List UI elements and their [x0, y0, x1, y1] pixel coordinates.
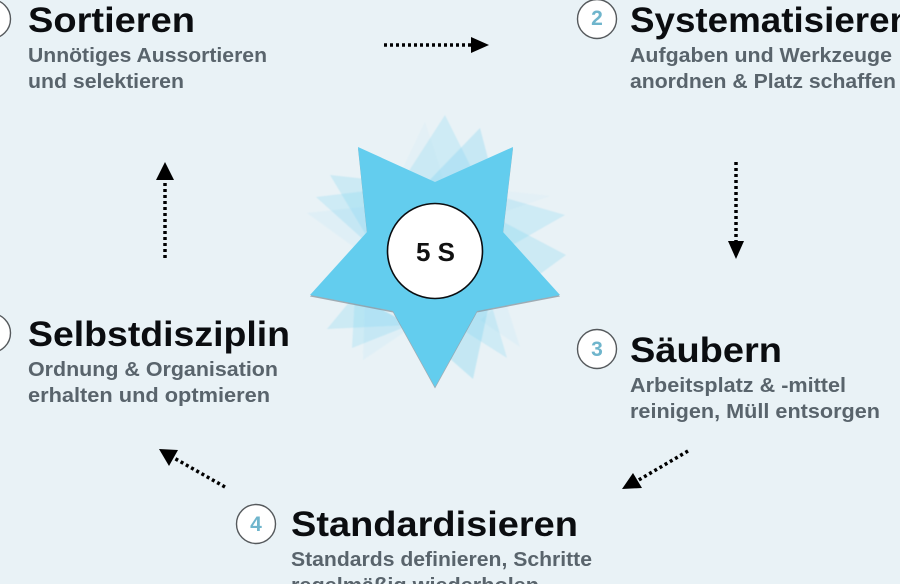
- step 2: Systematisieren: [578, 0, 900, 93]
- description: Unnötiges Aussortieren: [28, 45, 267, 67]
- arrow: step 3 to 4: [622, 451, 688, 489]
- description: [28, 45, 267, 93]
- arrow: step 5 to 1: [156, 162, 174, 258]
- description: Arbeitsplatz & -mittel: [630, 375, 846, 397]
- heading: Systematisieren: [630, 1, 900, 40]
- arrow: step 2 to 3: [728, 162, 744, 259]
- heading: Selbstdisziplin: [28, 315, 290, 354]
- badge 3: 3: [591, 338, 603, 361]
- description: reinigen, Müll entsorgen: [630, 401, 880, 423]
- star: [310, 148, 560, 388]
- badge 2: [578, 0, 616, 38]
- description: erhalten und optmieren: [28, 385, 270, 407]
- arrow: step 1 to 2: [384, 37, 489, 53]
- centre label: 5 S: [416, 237, 455, 267]
- heading: Standardisieren: [291, 505, 578, 544]
- description: und selektieren: [28, 71, 184, 93]
- badge 2: 2: [591, 7, 603, 30]
- description: Ordnung & Organisation: [28, 359, 278, 381]
- central star graphic: [307, 115, 566, 388]
- centre badge: [388, 204, 482, 298]
- step 4: Standardisieren: [236, 504, 592, 584]
- step 5: Selbstdisziplin: [0, 314, 290, 407]
- heading: Sortieren: [28, 1, 195, 40]
- step 1: Sortieren: [0, 0, 267, 93]
- badge 5: [0, 314, 10, 352]
- badge 3: [578, 330, 616, 368]
- arrow: step 4 to 5: [159, 449, 225, 487]
- description: Aufgaben und Werkzeuge: [630, 45, 892, 67]
- pale rotated star shards: [307, 115, 566, 379]
- description: [28, 359, 278, 407]
- description: [630, 45, 896, 93]
- badge 4: [236, 504, 276, 544]
- description: [291, 549, 592, 584]
- heading: Säubern: [630, 331, 782, 370]
- step 3: Säubern: [578, 330, 880, 423]
- badge 4: 4: [250, 513, 262, 536]
- badge 1: [0, 0, 10, 38]
- description: [630, 375, 880, 423]
- description: anordnen & Platz schaffen: [630, 71, 896, 93]
- description: Standards definieren, Schritte: [291, 549, 592, 571]
